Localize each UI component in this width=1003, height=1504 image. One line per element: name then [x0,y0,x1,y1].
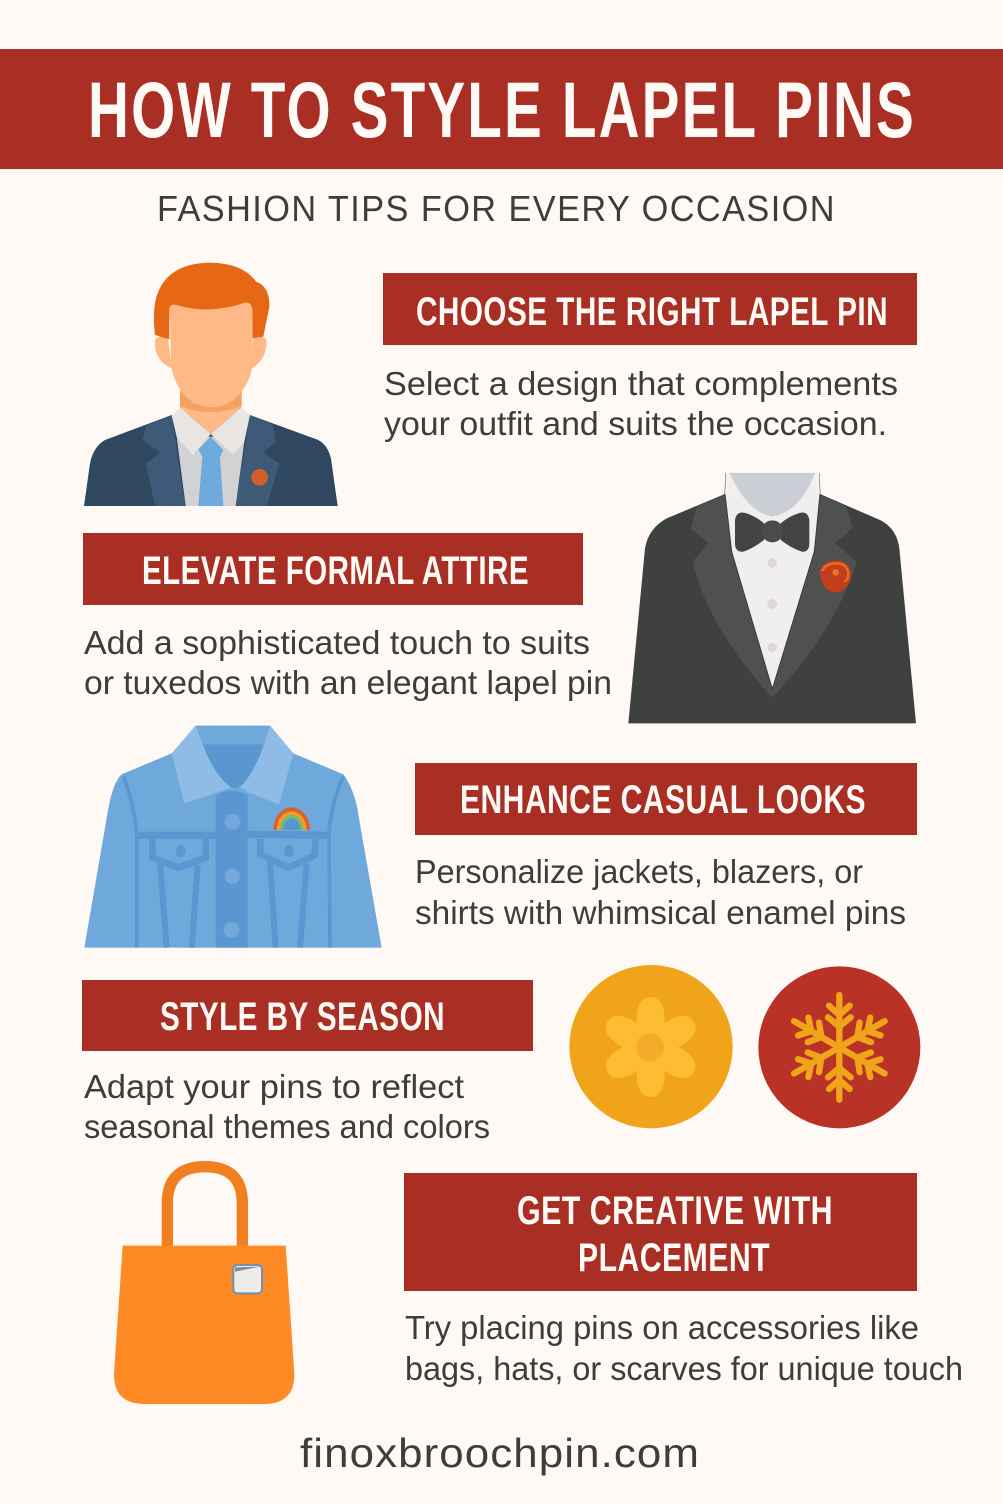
heading: enhance casual looks: ENHANCE CASUAL LOOKS [460,778,866,822]
body text [405,1309,963,1387]
heading: style by season [82,980,533,1051]
heading: get creative with placement [404,1173,917,1291]
icon: man in navy suit with pin [84,263,338,506]
body text [415,853,906,931]
body text: Select a design that complements [384,365,898,402]
heading: style by season: STYLE BY SEASON [160,995,445,1039]
body text: seasonal themes and colors [84,1108,490,1145]
body text: Try placing pins on accessories like [405,1309,919,1346]
body text: Add a sophisticated touch to suits [84,624,590,661]
body text: Adapt your pins to reflect [84,1068,464,1105]
icon: tuxedo with red flower pin [628,472,916,723]
heading: enhance casual looks [415,763,917,835]
heading: elevate formal attire [83,533,583,605]
icon: yellow flower pin [569,965,733,1128]
heading: get creative with placement: PLACEMENT [578,1236,770,1280]
body text [84,1068,490,1145]
body text: or tuxedos with an elegant lapel pin [84,664,612,701]
body text: Personalize jackets, blazers, or [415,853,863,890]
subtitle: FASHION TIPS FOR EVERY OCCASION [157,188,836,229]
body text: your outfit and suits the occasion. [384,405,887,442]
panel: elevate formal attire [83,472,916,723]
body text: bags, hats, or scarves for unique touch [405,1350,963,1387]
panel: style by season [82,965,920,1145]
body text [84,624,612,701]
icon: red snowflake pin [758,966,920,1128]
panel: choose the right lapel pin [84,263,917,506]
heading: elevate formal attire: ELEVATE FORMAL ATTIRE [142,549,529,593]
heading: get creative with placement: GET CREATIVE WITH [517,1189,833,1233]
panel: enhance casual looks [84,726,917,948]
body text: shirts with whimsical enamel pins [415,894,906,931]
panel: get creative with placement [114,1167,963,1404]
icon: denim jacket with rainbow pin [84,726,382,948]
icon: orange tote bag with pin [114,1167,294,1404]
title banner [0,49,1003,169]
footer website: finoxbroochpin.com [300,1430,700,1476]
heading: choose the right lapel pin [383,273,917,345]
body text [384,365,898,442]
